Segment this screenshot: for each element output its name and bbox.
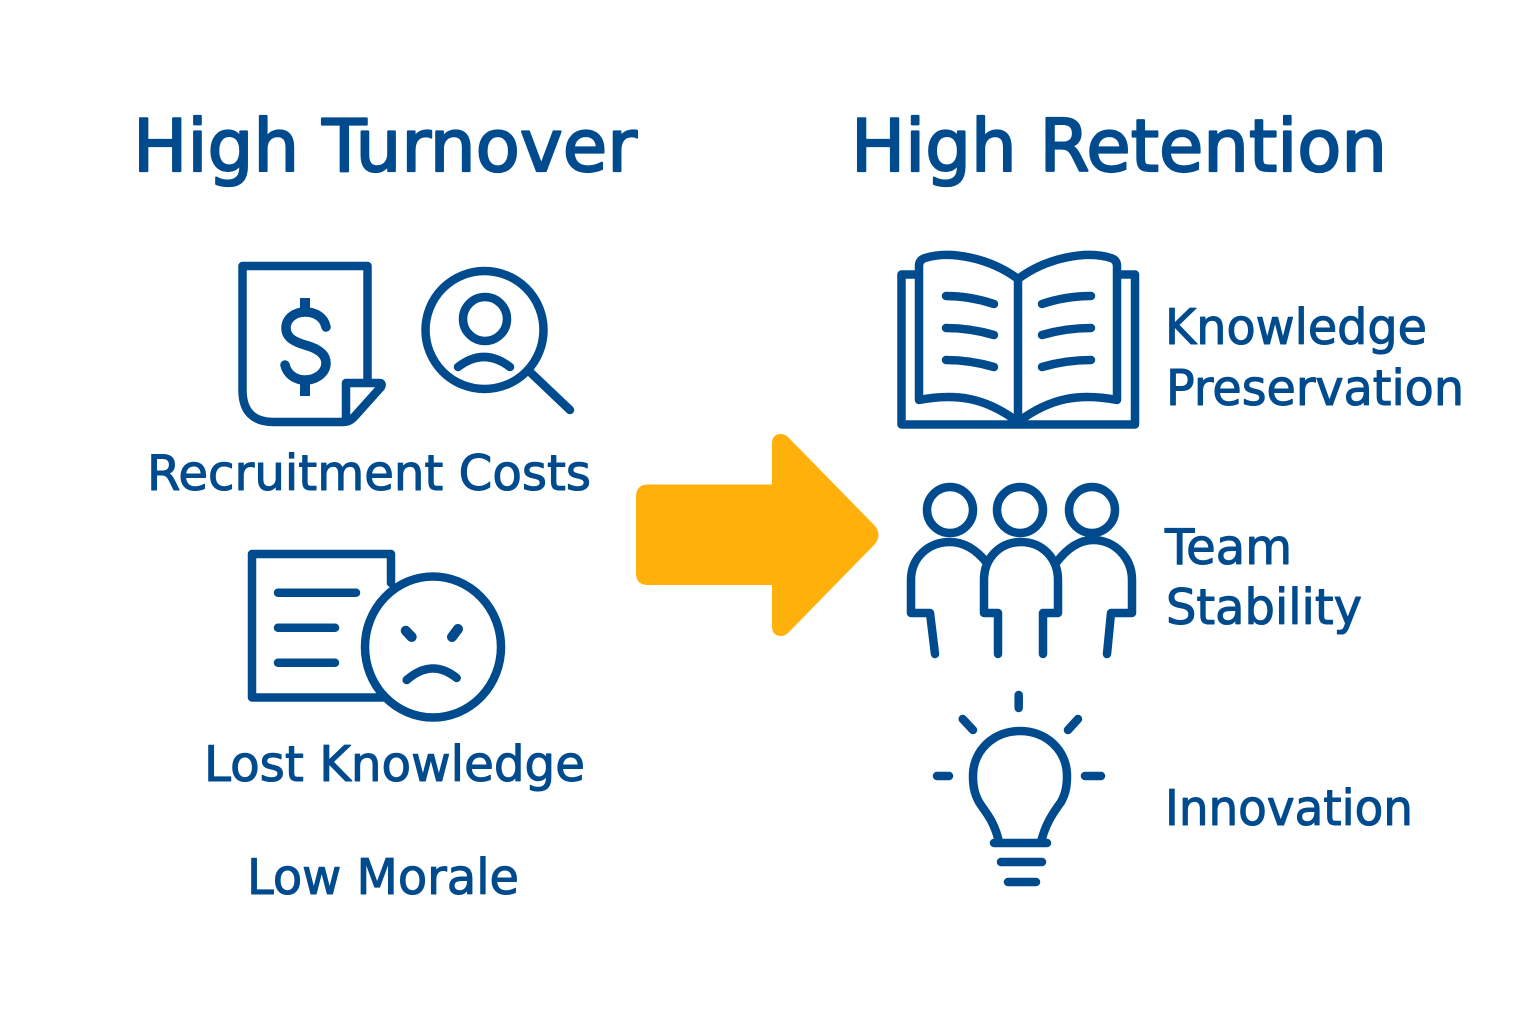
label: Team Stability: Team (1164, 519, 1292, 576)
label: Knowledge Preservation (1165, 299, 1464, 417)
heading: High Turnover: High Turnover (133, 104, 637, 188)
label: Knowledge Preservation: Knowledge (1165, 299, 1427, 356)
icon: light bulb (937, 695, 1101, 882)
label: Recruitment Costs: Recruitment Costs (147, 445, 591, 502)
label: Lost Knowledge: Lost Knowledge (204, 736, 585, 793)
label: Team Stability (1164, 519, 1362, 636)
icon: invoice with dollar sign (242, 266, 382, 422)
label: Team Stability: Stability (1166, 579, 1362, 636)
icon: team of three people (911, 487, 1132, 654)
heading: High Retention: High Retention (851, 104, 1387, 188)
icon: document with sad face (252, 554, 501, 718)
icon: magnifier with person (426, 271, 570, 410)
label: Knowledge Preservation: Preservation (1166, 360, 1464, 417)
label: Innovation: Innovation (1165, 780, 1413, 837)
icon: open book (902, 255, 1135, 424)
arrow: turnover to retention (636, 434, 878, 636)
label: Low Morale: Low Morale (247, 849, 519, 906)
